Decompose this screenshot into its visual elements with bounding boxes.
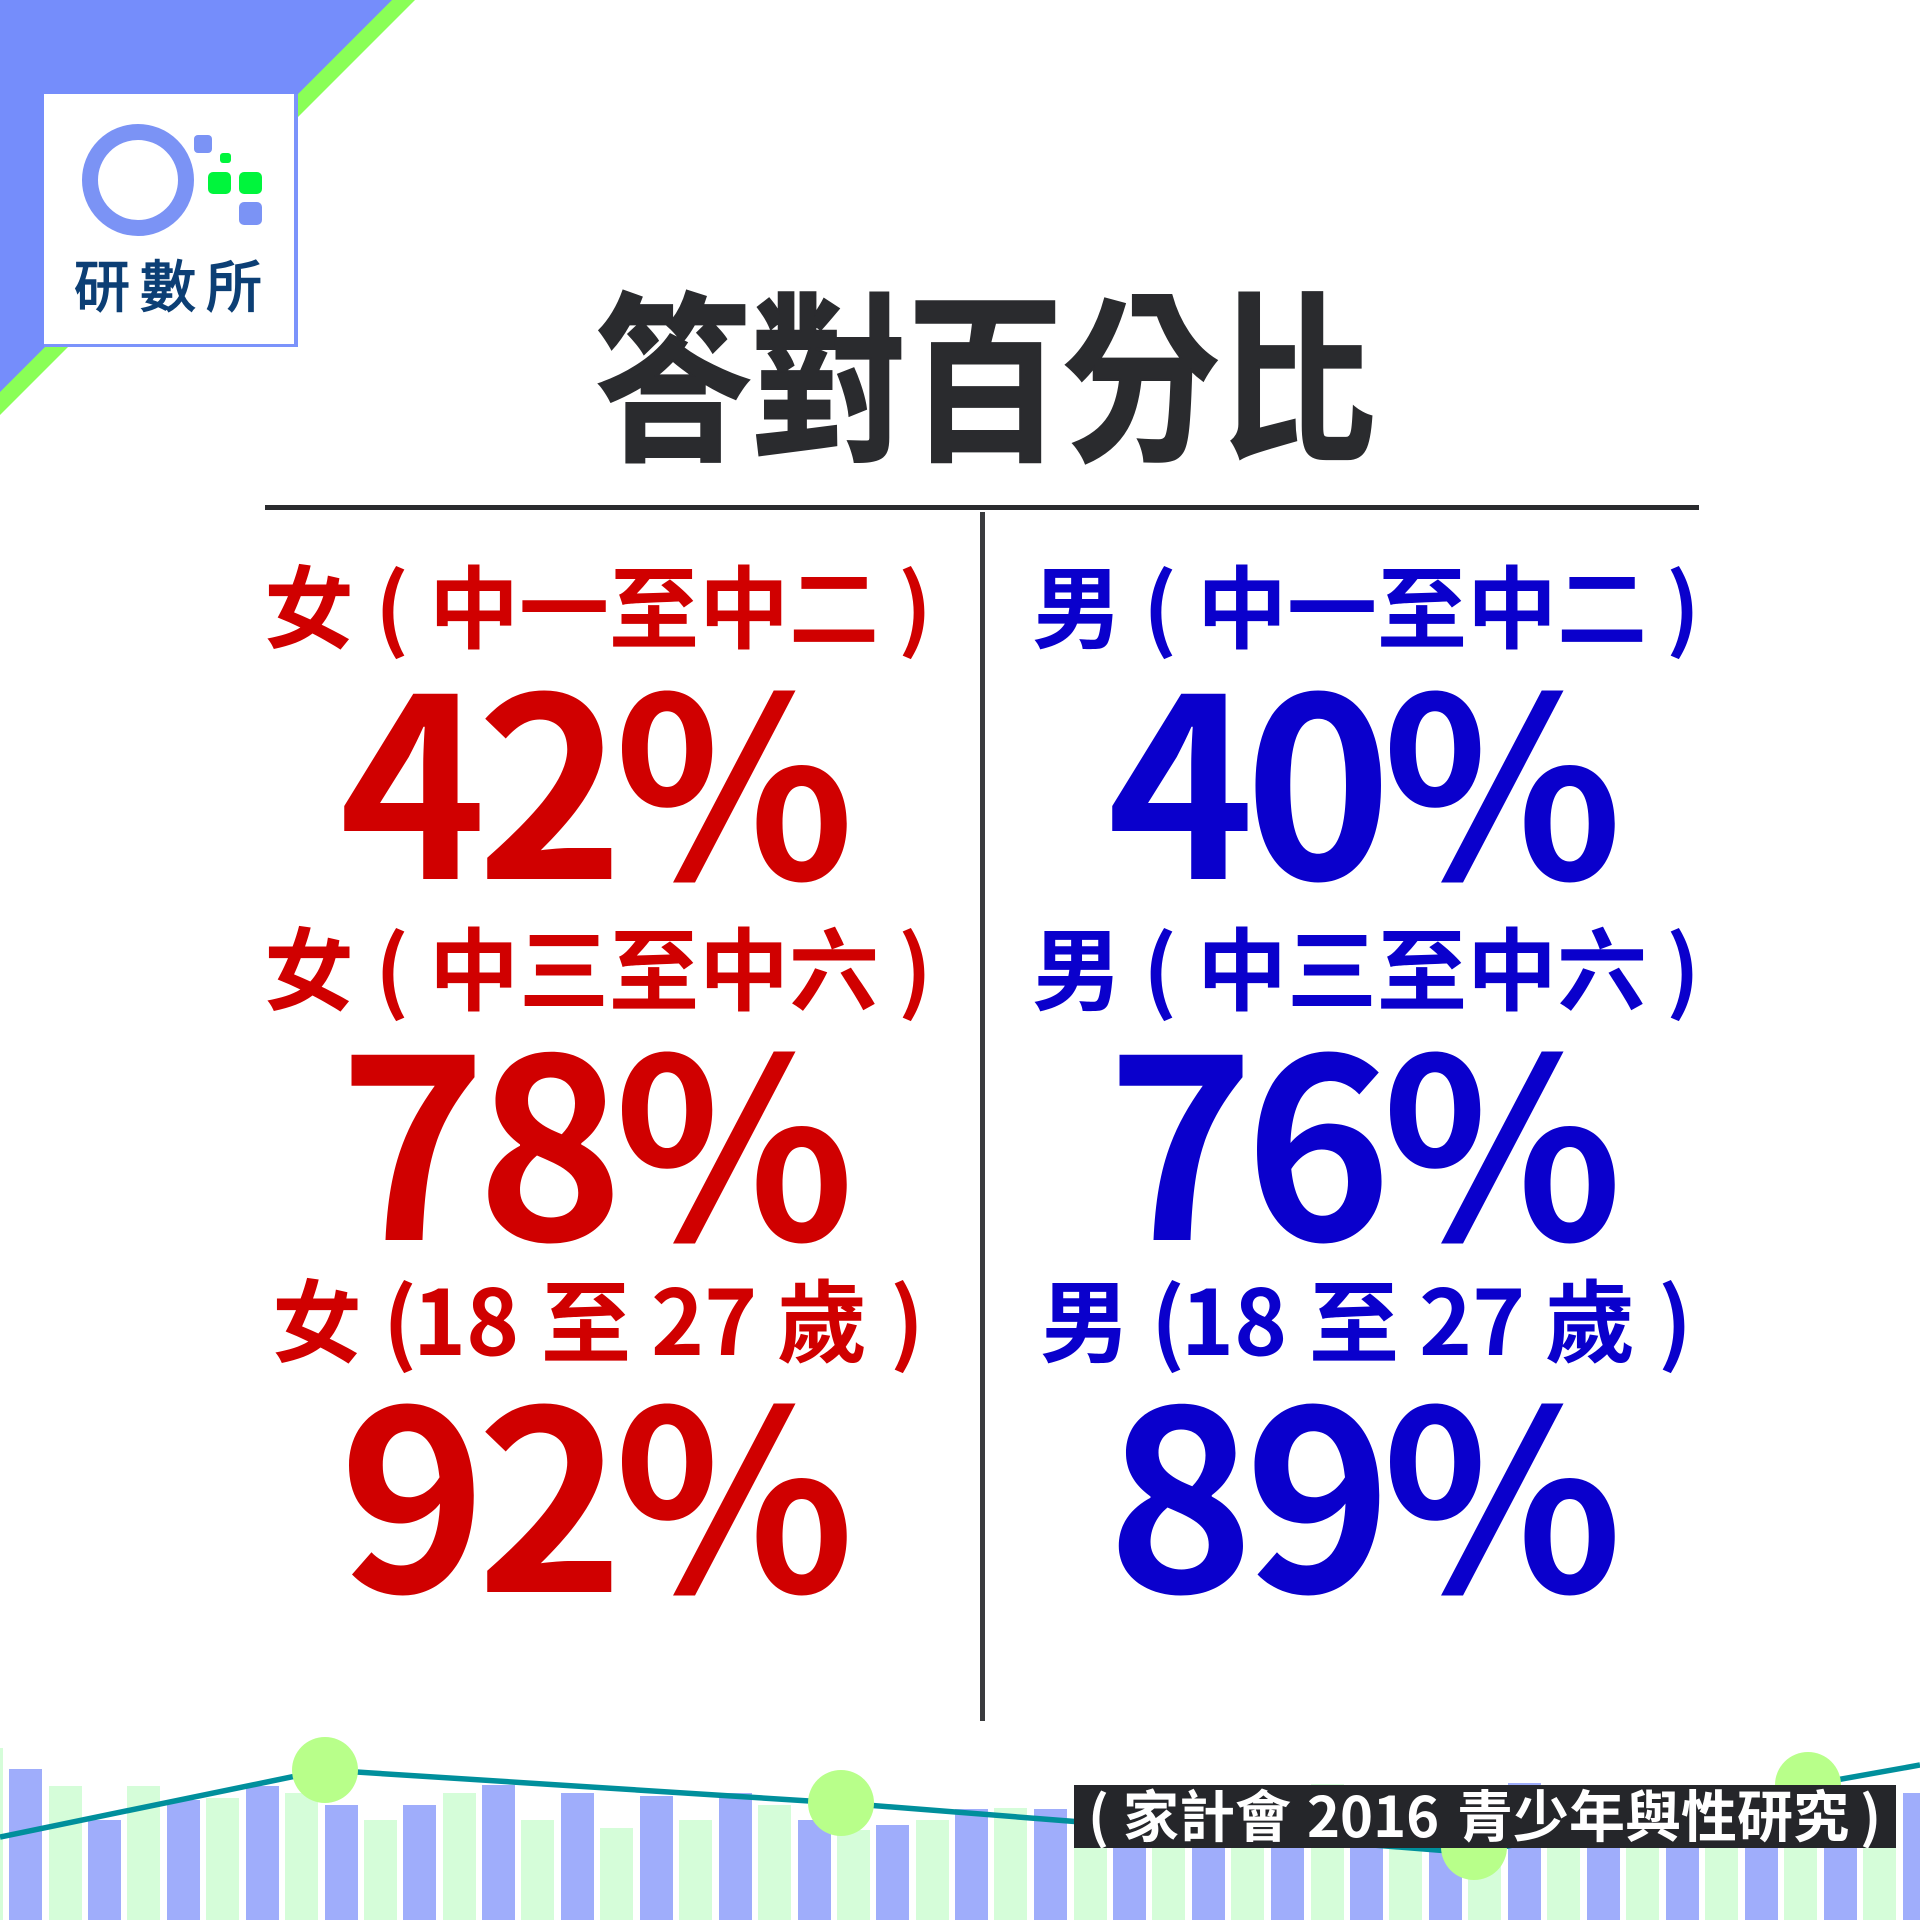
label: female 18-27: ( [383, 1251, 417, 1381]
value: 92%: 92% [339, 1302, 847, 1664]
decorative trend line [0, 1765, 1920, 1853]
source caption: ) [1860, 1773, 1881, 1854]
label: female S1-S2: 中一至中二 [429, 537, 879, 667]
label: male 18-27: 18 [1181, 1251, 1287, 1381]
decorative bar chart [0, 1748, 1920, 1920]
corner banner [0, 0, 415, 415]
label: male 18-27 [1040, 1251, 1692, 1381]
label: male S3-S6: 男 [1032, 899, 1122, 1029]
label: female 18-27 [272, 1251, 924, 1381]
label: female 18-27: ) [890, 1251, 924, 1381]
source caption: 青少年與性研究 [1457, 1773, 1849, 1854]
value: 40%: 40% [1107, 589, 1615, 951]
horizontal rule [265, 505, 1699, 510]
label: male 18-27: 至 [1309, 1251, 1399, 1381]
label: male 18-27: 27 [1419, 1251, 1525, 1381]
label: female S1-S2: ( [375, 537, 409, 667]
label: female S1-S2 [264, 537, 932, 667]
label: male 18-27: ) [1658, 1251, 1692, 1381]
title: 答對百分比 [595, 236, 1375, 498]
decorative trend markers [292, 1737, 1841, 1880]
label: female S3-S6: ( [375, 899, 409, 1029]
label: female 18-27: 至 [541, 1251, 631, 1381]
label: female 18-27: 女 [272, 1251, 362, 1381]
value: 76%: 76% [1107, 950, 1615, 1312]
panel: male [1032, 537, 1700, 1664]
label: male S1-S2: 中一至中二 [1197, 537, 1647, 667]
label: male S1-S2: ) [1666, 537, 1700, 667]
label: male 18-27: ( [1151, 1251, 1185, 1381]
label: male 18-27: 男 [1040, 1251, 1130, 1381]
source caption: 家計會 [1123, 1773, 1291, 1854]
label: male S3-S6: 中三至中六 [1197, 899, 1647, 1029]
label: male S1-S2 [1032, 537, 1700, 667]
vertical divider [980, 512, 985, 1721]
source caption: ( [1088, 1773, 1109, 1854]
label: female 18-27: 27 [651, 1251, 757, 1381]
label: female S3-S6: 女 [264, 899, 354, 1029]
logo: 研數所: 研數所 [74, 243, 272, 324]
panel: female [264, 537, 932, 1664]
value: 42%: 42% [339, 589, 847, 951]
label: male S3-S6: ) [1666, 899, 1700, 1029]
source caption [1074, 1773, 1896, 1854]
label: female 18-27: 歲 [777, 1251, 867, 1381]
source caption: 2016 [1307, 1773, 1439, 1854]
value: 78%: 78% [339, 950, 847, 1312]
label: male S3-S6 [1032, 899, 1700, 1029]
label: female S3-S6: 中三至中六 [429, 899, 879, 1029]
label: male S3-S6: ( [1143, 899, 1177, 1029]
label: female S3-S6: ) [898, 899, 932, 1029]
label: female S1-S2: ) [898, 537, 932, 667]
value: 89%: 89% [1107, 1302, 1615, 1664]
logo: 研數所 [44, 94, 298, 347]
label: male S1-S2: ( [1143, 537, 1177, 667]
label: female S1-S2: 女 [264, 537, 354, 667]
label: male 18-27: 歲 [1545, 1251, 1635, 1381]
label: female 18-27: 18 [413, 1251, 519, 1381]
label: female S3-S6 [264, 899, 932, 1029]
label: male S1-S2: 男 [1032, 537, 1122, 667]
